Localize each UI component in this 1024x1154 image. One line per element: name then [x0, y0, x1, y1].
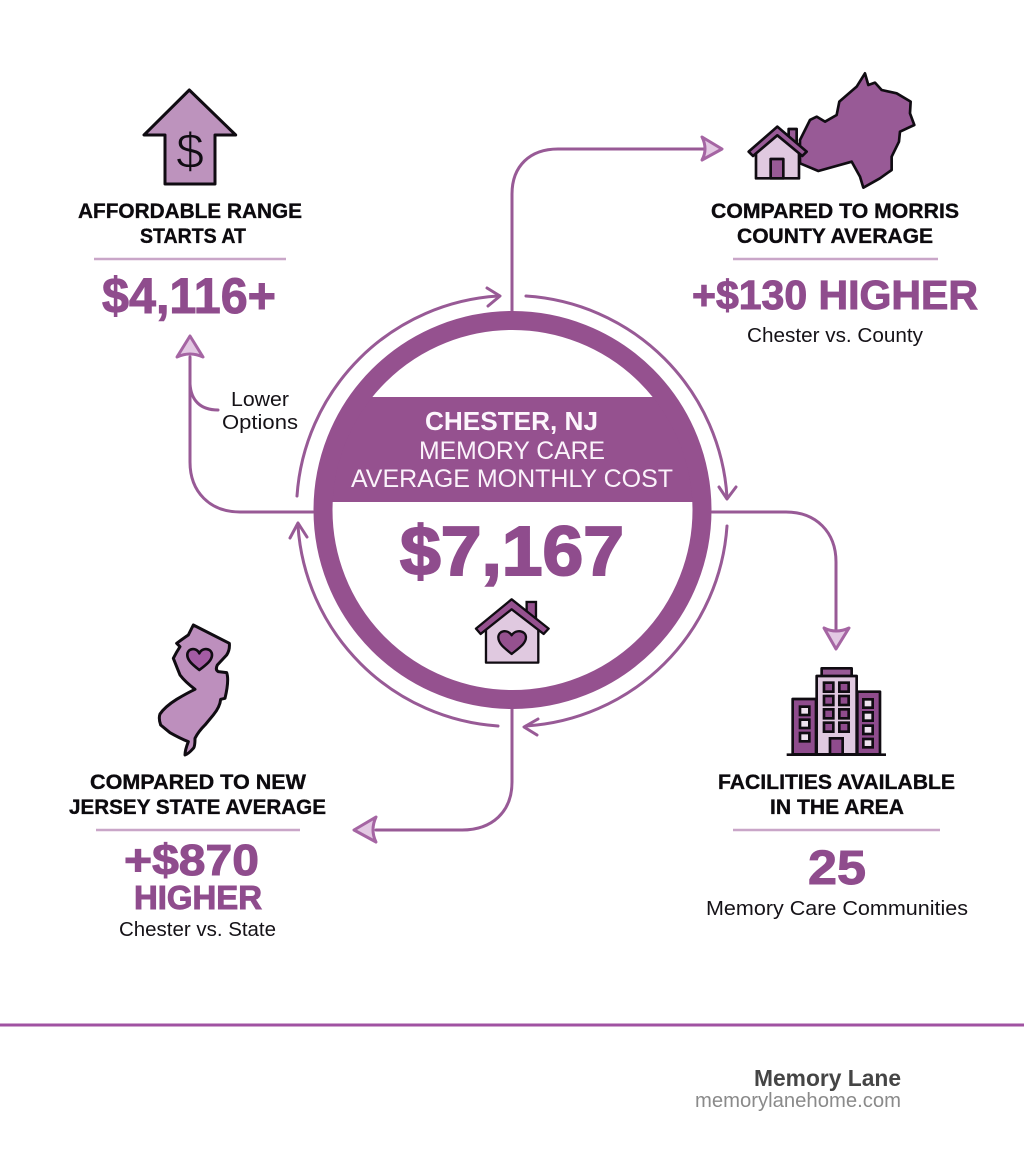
- footer name: Memory Lane: [754, 1065, 901, 1091]
- note: chester vs county: Chester vs. County: [747, 325, 923, 347]
- heading: facilities available: FACILITIES AVAILABLE: [718, 771, 955, 794]
- circular arrows around hub: [290, 288, 736, 735]
- panel: state comparison: [69, 625, 326, 941]
- note: memory care communities: Memory Care Communities: [706, 898, 968, 920]
- heading: compared to morris: COMPARED TO MORRIS: [711, 200, 959, 223]
- value: higher: HIGHER: [134, 879, 262, 916]
- heading: starts at: STARTS AT: [140, 225, 246, 248]
- heading: jersey state average: JERSEY STATE AVERAGE: [69, 796, 326, 819]
- hub subtitle: memory care: MEMORY CARE: [419, 437, 605, 465]
- value: 870: +$870: [124, 836, 259, 885]
- icon: up arrow with dollar: [144, 90, 236, 184]
- connector branch: lower options: [190, 384, 218, 410]
- icon: buildings: [787, 668, 886, 755]
- central hub circle: [322, 320, 702, 700]
- hub subtitle: average monthly cost: AVERAGE MONTHLY COST: [351, 465, 673, 493]
- heading: in the area: IN THE AREA: [770, 796, 904, 819]
- hub title: location: CHESTER, NJ: [425, 406, 598, 436]
- heading: affordable range: AFFORDABLE RANGE: [78, 200, 302, 223]
- label: lower options: Lower: [231, 389, 289, 411]
- label: lower options: [222, 389, 298, 434]
- connector arrow: to state comparison: [354, 708, 512, 842]
- footer brand: [695, 1065, 901, 1112]
- connector arrow: to county comparison: [512, 137, 722, 312]
- note: chester vs state: Chester vs. State: [119, 919, 276, 941]
- heading: compared to new: COMPARED TO NEW: [90, 771, 306, 794]
- footer url: memorylanehome.com: [695, 1090, 901, 1112]
- icon: county map with house: [749, 73, 914, 188]
- hub value: $7,167: [400, 512, 624, 590]
- icon: house with heart: [476, 599, 549, 663]
- value: 25: 25: [808, 842, 866, 895]
- panel: facilities: [706, 668, 968, 920]
- connector arrow: to facilities: [712, 512, 849, 649]
- hub title band: [323, 397, 702, 502]
- value: 4,116: $4,116+: [102, 268, 276, 324]
- connector arrow: to affordable range: [177, 336, 313, 512]
- panel: affordable range: [78, 90, 302, 434]
- icon: up arrow with dollar: $: [176, 123, 204, 179]
- heading: county average: COUNTY AVERAGE: [737, 225, 933, 248]
- icon: new jersey map with heart: [159, 625, 229, 755]
- panel: county comparison: [692, 73, 978, 347]
- label: lower options: Options: [222, 412, 298, 434]
- value: 130 higher: +$130 HIGHER: [692, 272, 978, 318]
